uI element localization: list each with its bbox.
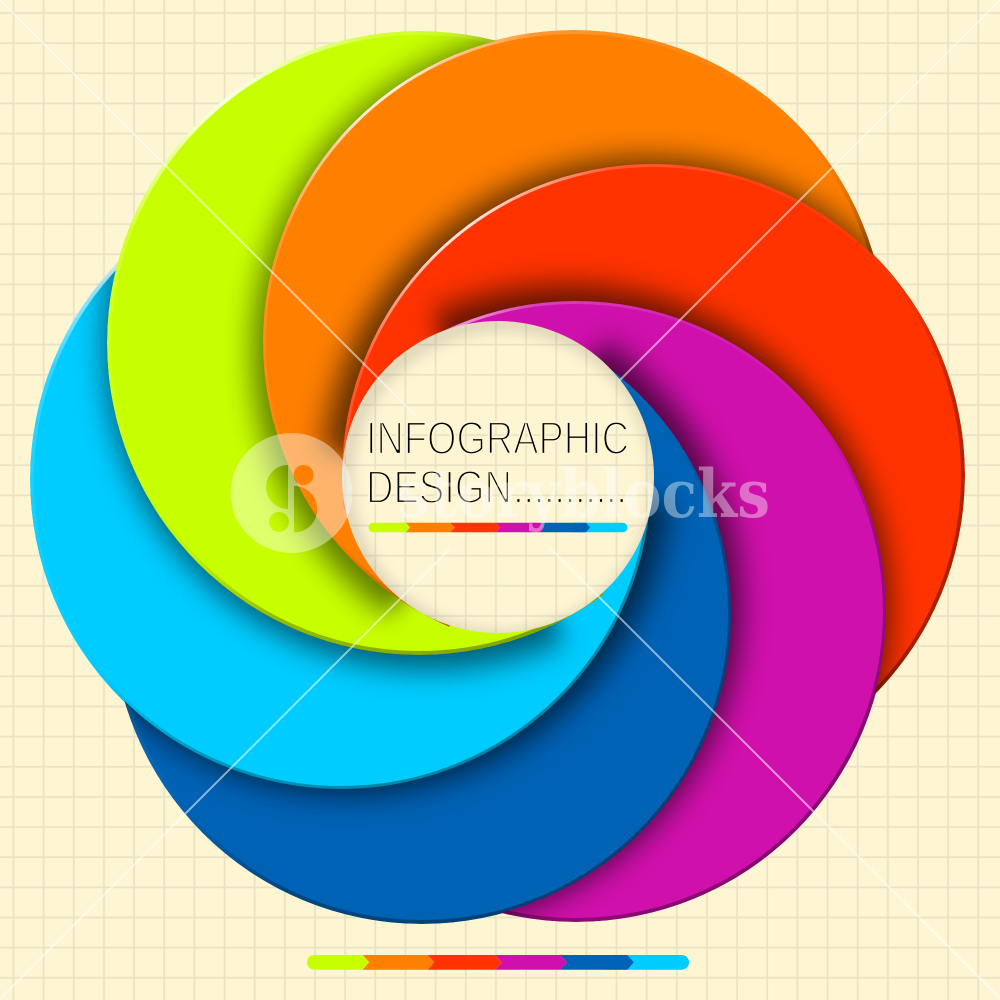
centre hole inner shadow [344, 323, 660, 639]
title text: DESIGN [366, 461, 512, 513]
panel: magenta disc [393, 301, 886, 922]
title text: INFOGRAPHIC [366, 412, 629, 464]
watermark wordmark: storyblocks [397, 455, 770, 533]
title text [366, 412, 629, 513]
panel: lime disc [107, 31, 604, 655]
watermark logo [230, 433, 352, 553]
small colour bar [368, 523, 628, 532]
panel: cyan disc [30, 262, 649, 789]
panel: orange disc [263, 30, 874, 627]
title text: ........... [512, 461, 628, 513]
panel: red disc [342, 164, 965, 695]
bottom colour bar [307, 955, 689, 970]
panel: blue disc [124, 369, 731, 924]
